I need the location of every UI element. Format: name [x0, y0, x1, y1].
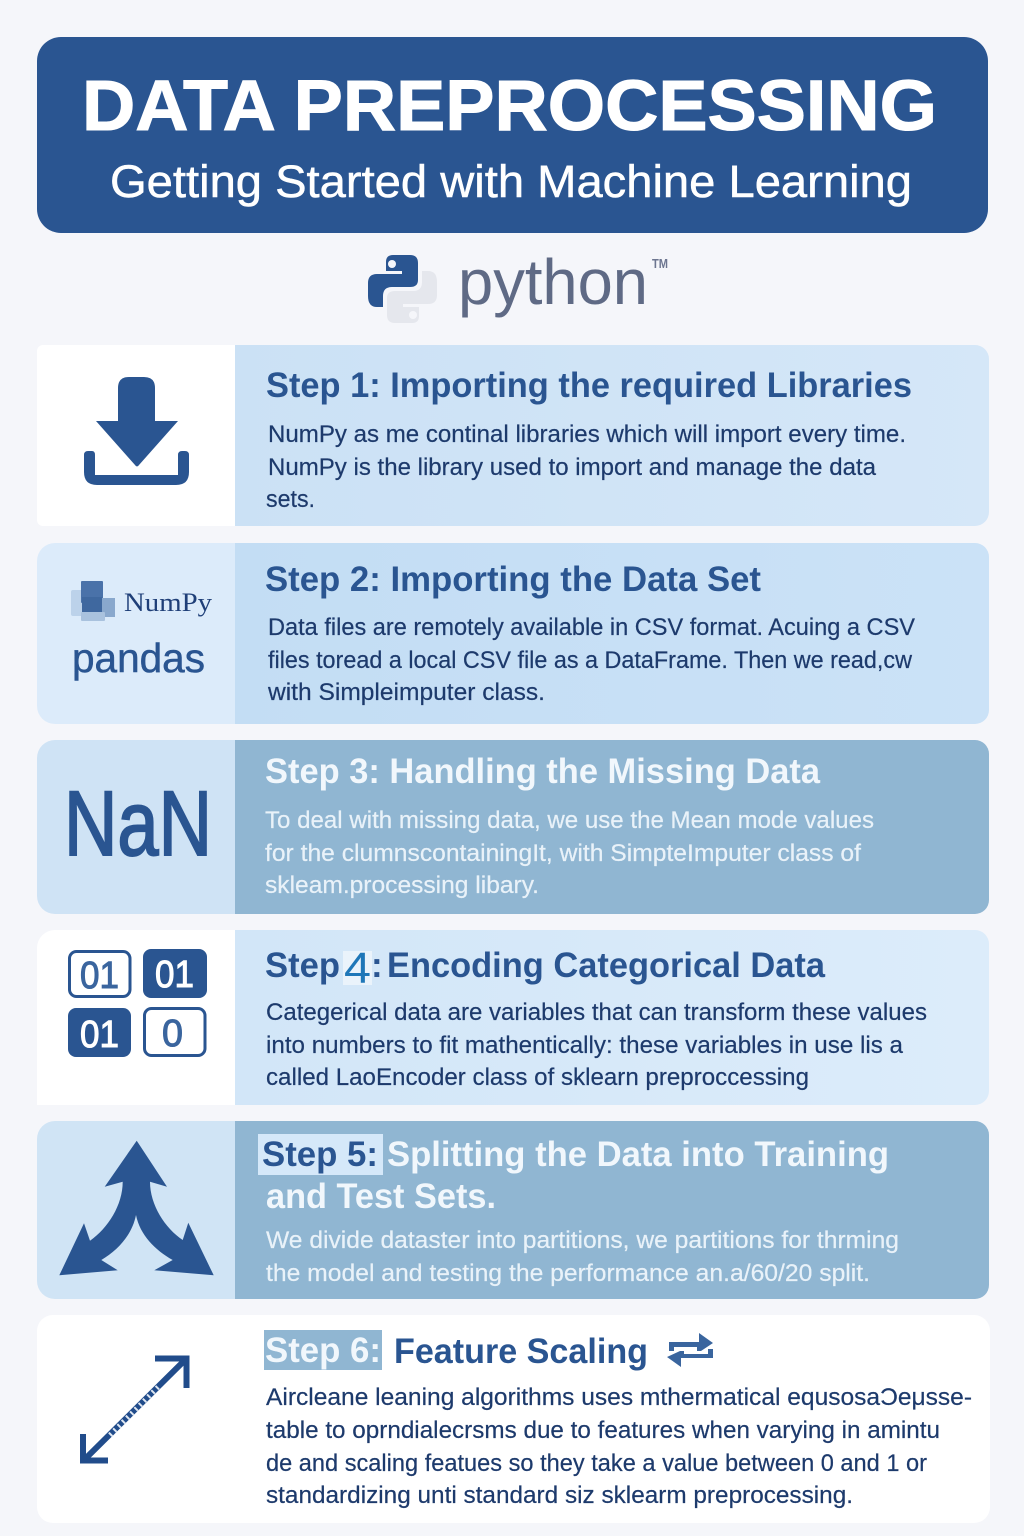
- body text: into numbers to fit mathentically: these variables in use lis a: [266, 1032, 904, 1059]
- icon: binary grid: 01: [80, 1014, 119, 1056]
- icon: binary grid: 01: [155, 954, 194, 996]
- trademark: TM: [652, 256, 668, 271]
- body text: the model and testing the performance an.a/60/20 split.: [266, 1260, 870, 1287]
- body text: standardizing unti standard siz sklearm preprocessing.: [266, 1482, 853, 1509]
- body text: [266, 421, 906, 513]
- heading: and Test Sets.: [266, 1177, 496, 1216]
- icon: binary grid: 01: [80, 955, 119, 997]
- body text: Data files are remotely available in CSV format. Acuing a CSV: [268, 614, 915, 641]
- heading: [258, 1134, 889, 1216]
- pandas wordmark: pandas: [72, 635, 205, 681]
- body text: [265, 807, 874, 899]
- panel: step 3: [37, 740, 989, 914]
- heading: Encoding Categorical Data: [387, 946, 826, 985]
- body text: [266, 1227, 899, 1287]
- python logo: [368, 246, 668, 323]
- header banner: [37, 37, 988, 233]
- heading: Step 5:: [262, 1135, 378, 1174]
- heading: [265, 944, 826, 993]
- icon: python snake blue: [368, 255, 418, 307]
- python wordmark: python: [458, 246, 648, 318]
- heading: :: [371, 946, 383, 985]
- body text: table to oprndialecrsms due to features when varying in amintu: [266, 1417, 940, 1444]
- panel: step 6: [37, 1315, 990, 1523]
- body text: We divide dataster into partitions, we partitions for thrming: [266, 1227, 899, 1254]
- icon: download: [84, 377, 189, 485]
- title: DATA PREPROCESSING: [82, 67, 937, 146]
- icon: NaN: NaN: [64, 773, 212, 875]
- heading: [264, 1330, 648, 1371]
- body text: NumPy as me continal libraries which will import every time.: [268, 421, 906, 448]
- body text: called LaoEncoder class of sklearn preproccessing: [266, 1064, 809, 1091]
- body text: Aircleane leaning algorithms uses mthermatical equsosaƆeμsse-: [266, 1384, 972, 1411]
- body text: [266, 999, 927, 1091]
- numpy wordmark: NumPy: [124, 588, 212, 617]
- body text: de and scaling featues so they take a value between 0 and 1 or: [266, 1450, 927, 1477]
- body text: NumPy is the library used to import and manage the data: [268, 454, 877, 481]
- heading: Step 3: Handling the Missing Data: [265, 752, 821, 791]
- body text: [266, 1384, 972, 1509]
- body text: with Simpleimputer class.: [267, 679, 545, 706]
- panel: step 2: [37, 543, 989, 724]
- icon: python snake grey: [387, 271, 437, 323]
- heading: Step 6:: [265, 1331, 381, 1370]
- subtitle: Getting Started with Machine Learning: [110, 156, 912, 207]
- icon: numpy cubes: [71, 581, 115, 621]
- heading: Step: [265, 946, 340, 985]
- heading: Feature Scaling: [394, 1332, 648, 1371]
- icon: swap arrows: [667, 1333, 713, 1367]
- icon: binary grid: [68, 949, 207, 1057]
- panel: step 4: [37, 930, 989, 1105]
- panel: step 1: [37, 345, 989, 526]
- panel: step 5: [37, 1121, 989, 1299]
- heading: Step 2: Importing the Data Set: [265, 560, 761, 599]
- icon: binary grid: 0: [162, 1013, 183, 1055]
- body text: files toread a local CSV file as a DataFrame. Then we read,cw: [268, 647, 913, 674]
- body text: Categerical data are variables that can transform these values: [266, 999, 927, 1026]
- body text: [267, 614, 915, 706]
- body text: To deal with missing data, we use the Mean mode values: [265, 807, 874, 834]
- heading: Splitting the Data into Training: [387, 1135, 889, 1174]
- heading: 4: [344, 944, 371, 993]
- body text: sets.: [266, 486, 315, 513]
- icon: diagonal scaling arrow: [83, 1358, 186, 1460]
- body text: skleam.processing libary.: [265, 872, 539, 899]
- icon: split arrows: [59, 1141, 214, 1275]
- heading: Step 1: Importing the required Libraries: [266, 366, 912, 405]
- body text: for the clumnscontainingIt, with SimpteImputer class of: [265, 840, 861, 867]
